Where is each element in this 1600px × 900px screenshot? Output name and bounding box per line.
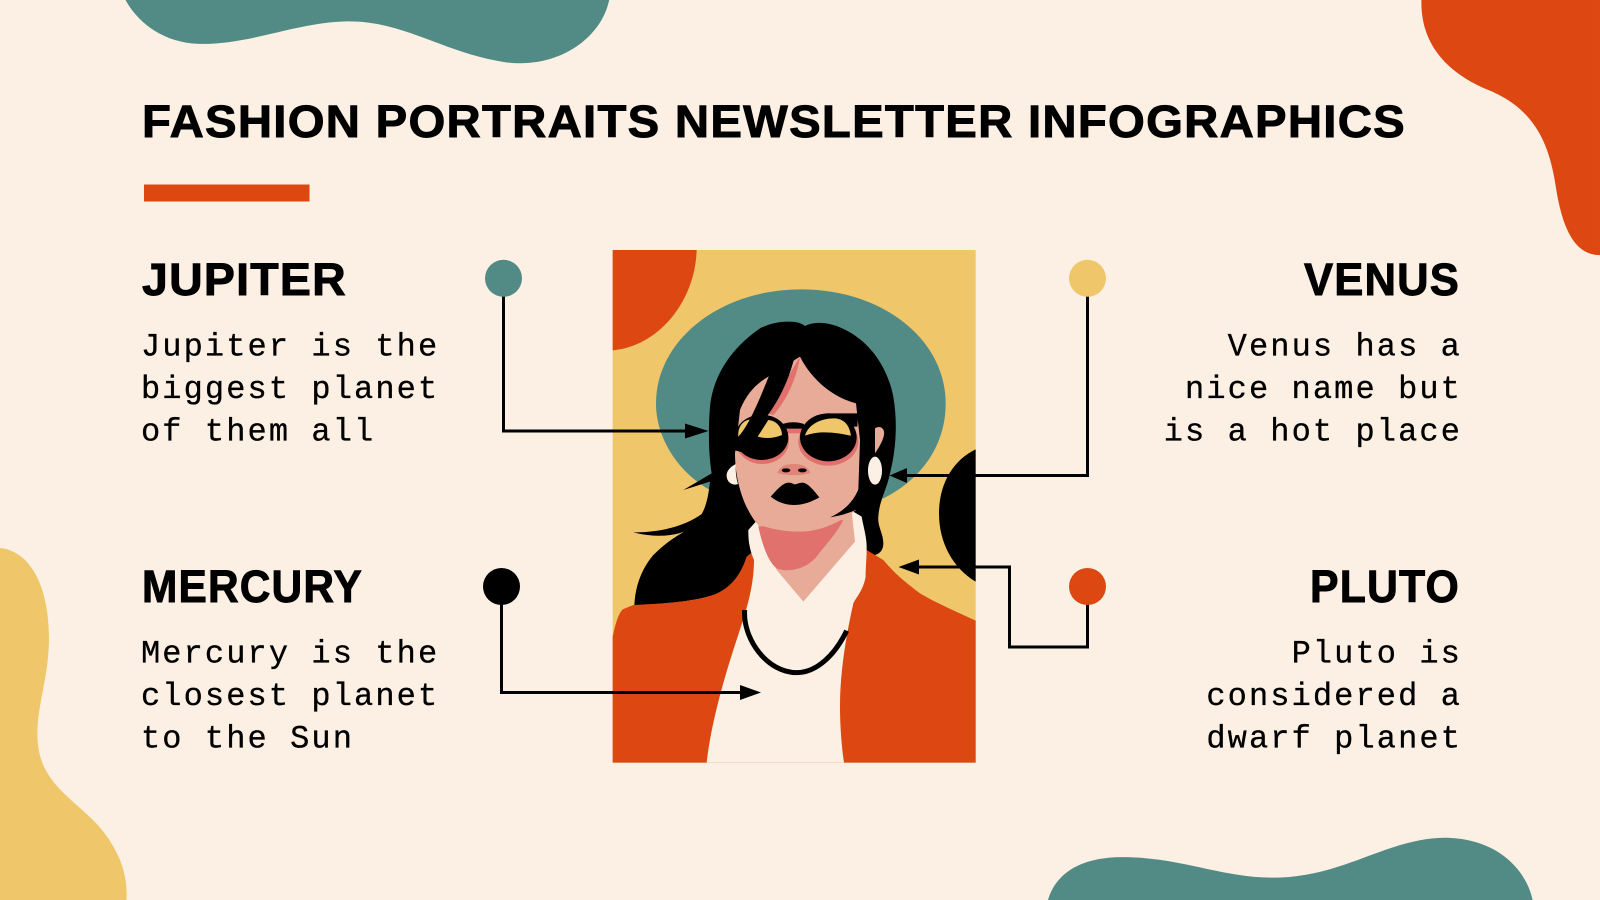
dot bbox=[483, 568, 520, 605]
heading: VENUS bbox=[1304, 254, 1460, 305]
body: nice name but bbox=[1185, 371, 1462, 408]
blob: top teal bbox=[126, 0, 609, 63]
arrowhead bbox=[890, 468, 907, 483]
connector line bbox=[905, 290, 1088, 476]
bridge bbox=[783, 422, 804, 429]
body: of them all bbox=[141, 414, 375, 451]
bridge shadow bbox=[783, 427, 804, 433]
body: Mercury is the bbox=[141, 636, 439, 673]
nostril bbox=[798, 468, 807, 472]
body: Venus has a bbox=[1228, 329, 1462, 366]
heading: PLUTO bbox=[1310, 561, 1460, 612]
body: Jupiter is the bbox=[141, 329, 439, 366]
portrait background bbox=[613, 250, 976, 763]
hat bbox=[656, 289, 946, 498]
hair strand over cheek bbox=[830, 478, 867, 517]
lips bbox=[771, 483, 819, 505]
orange quarter circle bbox=[613, 250, 697, 350]
left lens reflection bbox=[758, 420, 782, 438]
hair bbox=[633, 322, 896, 606]
text block: Pluto bbox=[1206, 561, 1462, 758]
neck bbox=[757, 512, 855, 602]
body: considered a bbox=[1206, 678, 1462, 715]
connector line bbox=[502, 590, 745, 692]
arrowhead bbox=[740, 685, 761, 700]
connector line bbox=[504, 290, 690, 431]
text block: Jupiter bbox=[141, 254, 439, 451]
necklace bbox=[745, 610, 847, 673]
frame top right bbox=[827, 413, 858, 427]
neck shadow bbox=[758, 520, 843, 570]
nose bbox=[777, 464, 810, 475]
shirt and collar bbox=[707, 512, 867, 763]
left lens bbox=[735, 415, 788, 460]
blob: top right orange bbox=[1421, 0, 1600, 255]
jacket bbox=[613, 550, 976, 763]
arrow: Venus bbox=[890, 260, 1106, 483]
right lens reflection bbox=[805, 418, 851, 436]
body: to the Sun bbox=[141, 721, 354, 758]
dot bbox=[1069, 260, 1106, 297]
title accent bar bbox=[144, 184, 310, 202]
title: FASHION PORTRAITS NEWSLETTER INFOGRAPHICS bbox=[142, 96, 1406, 147]
face bbox=[735, 357, 860, 532]
arrow: Pluto bbox=[898, 560, 1106, 647]
text block: Mercury bbox=[141, 561, 439, 758]
right lens bbox=[800, 413, 857, 461]
sunglasses bbox=[735, 413, 858, 466]
heading: JUPITER bbox=[142, 254, 347, 305]
dot bbox=[1069, 568, 1106, 605]
nostril bbox=[782, 468, 790, 472]
body: is a hot place bbox=[1164, 414, 1462, 451]
hair strand bbox=[733, 355, 795, 453]
blob: bottom left yellow bbox=[0, 548, 127, 900]
blob: bottom right teal bbox=[1048, 838, 1533, 900]
left lens shadow bbox=[736, 418, 789, 464]
right lens shadow bbox=[798, 418, 858, 466]
left earring bbox=[727, 464, 738, 485]
body: Pluto is bbox=[1292, 636, 1462, 673]
arrow: Jupiter bbox=[485, 260, 708, 438]
text block: Venus bbox=[1164, 254, 1462, 451]
left lens reflection bbox=[738, 419, 751, 437]
earrings bbox=[868, 457, 882, 485]
arrow: Mercury bbox=[483, 568, 761, 700]
body: biggest planet bbox=[141, 371, 439, 408]
connector line bbox=[915, 567, 1088, 647]
body: dwarf planet bbox=[1206, 721, 1462, 758]
arrowhead bbox=[685, 424, 708, 438]
arrowhead bbox=[898, 560, 919, 574]
heading: MERCURY bbox=[142, 561, 363, 612]
body: closest planet bbox=[141, 678, 439, 715]
portrait illustration bbox=[613, 250, 976, 763]
dot bbox=[485, 260, 522, 297]
hair strand shadow bbox=[767, 357, 800, 415]
black half circle bbox=[939, 449, 976, 582]
ear bbox=[875, 427, 884, 453]
